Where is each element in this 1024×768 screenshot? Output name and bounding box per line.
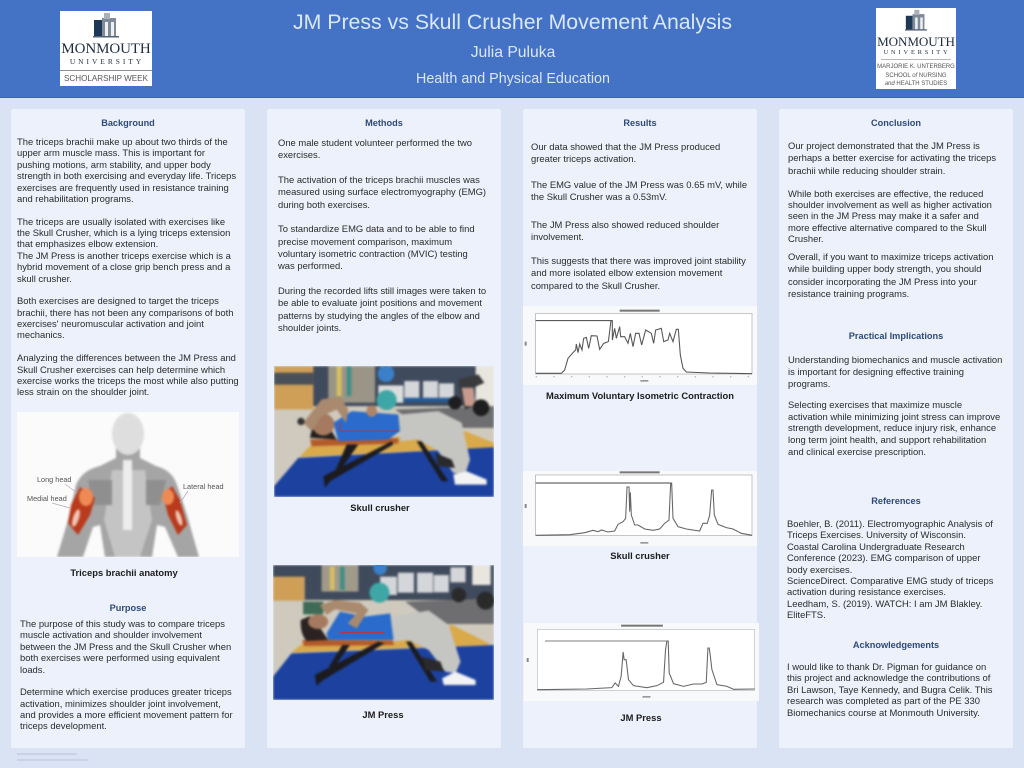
text: shoulder involvement: The JM Press also showed reduced shoulder xyxy=(531,219,719,230)
text: exercise selection: long term joint health, and support rehabilitation xyxy=(788,434,986,445)
text: safety comparison: more effective alternative compared to the Skull xyxy=(788,222,987,233)
text: purpose: and provides a more efficient movement pattern for xyxy=(20,709,233,720)
text: conclusion: perhaps a better exercise for activating the triceps xyxy=(788,152,996,163)
text: purpose: The purpose of this study was to compare triceps xyxy=(20,618,225,629)
logo: Monmouth University School of Nursing: MONMOUTH xyxy=(877,34,955,48)
text: purpose: Determine which exercise produces greater triceps xyxy=(20,686,232,697)
text: interpretation xyxy=(531,255,746,291)
text: recommendation: while building upper body strength, you should xyxy=(788,263,981,274)
text: background: mechanics. xyxy=(17,329,65,340)
logo: Monmouth University Scholarship Week: MONMOUTH xyxy=(61,41,151,57)
text: background: exercise works the triceps the most while also putting xyxy=(17,375,239,386)
text: safety comparison: While both exercises are effective, the reduced xyxy=(788,188,983,199)
chart: MVIC EMG trace xyxy=(523,306,757,385)
text: references: EliteFTS. xyxy=(787,609,826,620)
icon: university building xyxy=(905,10,927,31)
text: references: Triceps Exercises. University of Wisconsin. xyxy=(787,529,966,540)
text: exercise selection: and clinical exercise prescription. xyxy=(788,446,926,457)
text: methods: During the recorded lifts still images were taken to xyxy=(278,285,486,296)
text: methods: precise movement comparison, maximum xyxy=(278,236,452,247)
text: background: Both exercises are designed to target the triceps xyxy=(17,295,219,306)
text: acknowledgements: Biomechanics course at Monmouth University. xyxy=(787,706,980,718)
text: safety comparison: seen in the JM Press may make it a safer and xyxy=(788,210,979,221)
panel: results xyxy=(523,109,757,748)
text: recommendation: resistance training programs. xyxy=(788,288,909,299)
caption: triceps anatomy: Triceps brachii anatomy xyxy=(70,567,178,578)
text: recommendation: consider incorporating the JM Press into your xyxy=(788,276,977,287)
text: results summary: greater triceps activation. xyxy=(531,153,636,164)
text: background: The JM Press is another triceps exercise which is a xyxy=(17,250,231,261)
caption: skull crusher: Skull crusher xyxy=(350,502,410,513)
text: references: body exercises. xyxy=(787,564,852,574)
text: exercise selection: activation while minimizing joint stress can improve xyxy=(788,411,1000,422)
text: methods: exercises. xyxy=(278,149,320,160)
caption: MVIC: Maximum Voluntary Isometric Contraction xyxy=(546,390,734,401)
text: methods xyxy=(278,137,486,333)
logo: Monmouth University Scholarship Week xyxy=(60,11,152,86)
text: interpretation: This suggests that there was improved joint stability xyxy=(531,255,746,266)
text: interpretation: and more isolated elbow extension movement xyxy=(531,267,722,278)
text: references: Boehler, B. (2011). Electromyographic Analysis of xyxy=(787,518,993,529)
text: EMG values: the Skull Crusher was a 0.53mV. xyxy=(531,191,667,202)
text: methods: voluntary isometric contraction (MVIC) testing xyxy=(278,248,468,259)
icon: university building xyxy=(93,13,119,38)
text: references: Leedham, S. (2019). WATCH: I am JM Blakley. xyxy=(787,598,982,609)
photo: skull crusher xyxy=(274,366,494,497)
chart: skull crusher EMG trace xyxy=(523,471,757,546)
text: methods: was performed. xyxy=(278,260,343,271)
text: shoulder involvement: involvement. xyxy=(531,231,584,242)
panel: methods xyxy=(267,109,501,748)
text: background: The triceps brachii make up about two thirds of the xyxy=(17,136,228,147)
text: practical implications: programs. xyxy=(788,378,830,388)
caption: skull crusher chart: Skull crusher xyxy=(610,550,670,561)
text: EMG values: The EMG value of the JM Press was 0.65 mV, while xyxy=(531,179,747,190)
text: background: Analyzing the differences between the JM Press and xyxy=(17,352,236,363)
heading: references: References xyxy=(871,496,921,506)
heading: conclusion: Conclusion xyxy=(871,118,921,128)
text: acknowledgements: this project and acknowledge the contributions of xyxy=(787,672,990,683)
figure: triceps anatomy illustration xyxy=(17,412,239,557)
heading: practical implications: Practical Implications xyxy=(849,331,943,341)
text: references: Conference (2023). EMG comparison of upper xyxy=(787,552,980,563)
text: purpose xyxy=(20,618,233,731)
text: methods: measured using surface electromyography (EMG) xyxy=(278,186,486,197)
text: acknowledgements xyxy=(787,661,992,718)
heading: results: Results xyxy=(623,118,657,128)
logo: Monmouth University School of Nursing: SCHOOL of NURSING xyxy=(885,73,947,79)
logo: Monmouth University School of Nursing: UNIVERSITY xyxy=(884,48,950,56)
text: references: Coastal Carolina Undergraduate Research xyxy=(787,541,965,552)
text: background: pushing motions, arm stability, and upper body xyxy=(17,159,211,170)
text: background xyxy=(17,136,239,397)
text: methods: The activation of the triceps brachii muscles was xyxy=(278,174,480,185)
text: background: that emphasizes elbow extension. xyxy=(17,238,158,249)
heading: background: Background xyxy=(101,118,155,128)
text: exercise selection xyxy=(788,399,1000,457)
heading: acknowledgements: Acknowledgements xyxy=(853,640,939,650)
logo: Monmouth University School of Nursing xyxy=(876,8,956,89)
text: methods: patterns by studying the angles of the elbow and xyxy=(278,310,480,321)
text: methods: One male student volunteer performed the two xyxy=(278,137,472,148)
figure: triceps anatomy illustration: Medial head xyxy=(27,494,67,503)
text: methods: shoulder joints. xyxy=(278,322,341,333)
heading: purpose: Purpose xyxy=(110,603,146,613)
heading: methods: Methods xyxy=(365,118,403,128)
author: Julia Puluka xyxy=(471,44,555,61)
text: exercise selection: Selecting exercises that maximize muscle xyxy=(788,399,962,410)
text: background: Skull Crusher exercises can help determine which xyxy=(17,364,225,374)
text: purpose: between the JM Press and the Skull Crusher when xyxy=(20,641,231,652)
panel: background and purpose xyxy=(11,109,245,748)
chart: JM press EMG trace xyxy=(524,623,759,701)
text: results summary: Our data showed that the JM Press produced xyxy=(531,141,720,152)
text: purpose: loads. xyxy=(20,664,45,674)
text: conclusion: Our project demonstrated that the JM Press is xyxy=(788,140,980,151)
text: safety comparison: Crusher. xyxy=(788,233,824,244)
text: safety comparison: shoulder involvement as well as higher activation xyxy=(788,199,992,210)
logo: Monmouth University School of Nursing: and HEALTH STUDIES xyxy=(885,81,947,87)
text: methods: during both exercises. xyxy=(278,199,370,210)
figure: triceps anatomy illustration: Lateral head xyxy=(183,482,224,491)
department: Health and Physical Education xyxy=(416,70,610,86)
text: background: strength in both exercising and everyday life. Triceps xyxy=(17,170,236,181)
figure: triceps anatomy illustration: Long head xyxy=(37,475,72,484)
text: references: activation during resistance exercises. xyxy=(787,586,946,597)
text: methods: be able to evaluate joint positions and movement xyxy=(278,297,482,308)
header banner xyxy=(0,0,1024,98)
logo: Monmouth University Scholarship Week: UNIVERSITY xyxy=(70,57,144,66)
text: interpretation: compared to the Skull Crusher. xyxy=(531,280,660,291)
photo: JM press xyxy=(273,565,494,700)
text: background: less strain on the shoulder joint. xyxy=(17,386,149,397)
text: background: exercises are frequently used in resistance training xyxy=(17,182,229,192)
text: practical implications xyxy=(788,354,1002,389)
text: references: ScienceDirect. Comparative EMG study of triceps xyxy=(787,575,994,586)
text: background: and rehabilitation programs. xyxy=(17,193,134,204)
caption: JM press: JM Press xyxy=(362,709,404,720)
text: conclusion: brachii while reducing shoulder strain. xyxy=(788,165,945,176)
text: background: hybrid movement of a close grip bench press and a xyxy=(17,261,230,272)
caption: JM press chart: JM Press xyxy=(620,712,662,723)
text: purpose: muscle activation and shoulder involvement xyxy=(20,629,202,640)
text: exercise selection: strength development, reduce injury risk, enhance xyxy=(788,422,996,433)
text: purpose: triceps development. xyxy=(20,720,107,731)
text: acknowledgements: Bri Lawson, Taye Kennedy, and Bugra Celik. This xyxy=(787,684,992,695)
footer: faint template credit marks xyxy=(17,753,88,761)
text: background: The triceps are usually isolated with exercises like xyxy=(17,216,225,227)
text: background: exercises' neuromuscular activation and joint xyxy=(17,318,204,329)
text: conclusion xyxy=(788,140,996,176)
logo: Monmouth University School of Nursing: MARJORIE K. UNTERBERG xyxy=(877,64,955,70)
text: results summary xyxy=(531,141,720,164)
title: JM Press vs Skull Crusher Movement Analysis xyxy=(293,10,732,34)
text: background: the Skull Crusher, which is a lying triceps extension xyxy=(17,227,230,238)
panel: conclusion and closing sections xyxy=(779,109,1013,748)
text: practical implications: Understanding biomechanics and muscle activation xyxy=(788,354,1002,364)
text: shoulder involvement xyxy=(531,219,720,242)
text: background: skull crusher. xyxy=(17,272,72,284)
logo: Monmouth University Scholarship Week: SCHOLARSHIP WEEK xyxy=(64,74,148,83)
text: purpose: both exercises were performed using equivalent xyxy=(20,652,220,663)
text: methods: To standardize EMG data and to be able to find xyxy=(278,223,475,234)
text: acknowledgements: research was completed as part of the PE 330 xyxy=(787,695,980,706)
text: EMG values xyxy=(531,179,747,202)
text: background: upper arm muscle mass. This is important for xyxy=(17,147,205,158)
text: recommendation xyxy=(788,251,993,299)
text: recommendation: Overall, if you want to maximize triceps activation xyxy=(788,251,993,262)
text: background: brachii, there has not been any comparisons of both xyxy=(17,307,233,318)
text: acknowledgements: I would like to thank Dr. Pigman for guidance on xyxy=(787,661,986,672)
text: practical implications: is important for designing effective training xyxy=(788,366,964,376)
text: purpose: activation, minimizes shoulder joint involvement, xyxy=(20,698,221,709)
text: references xyxy=(787,518,994,620)
text: safety comparison xyxy=(788,188,992,244)
